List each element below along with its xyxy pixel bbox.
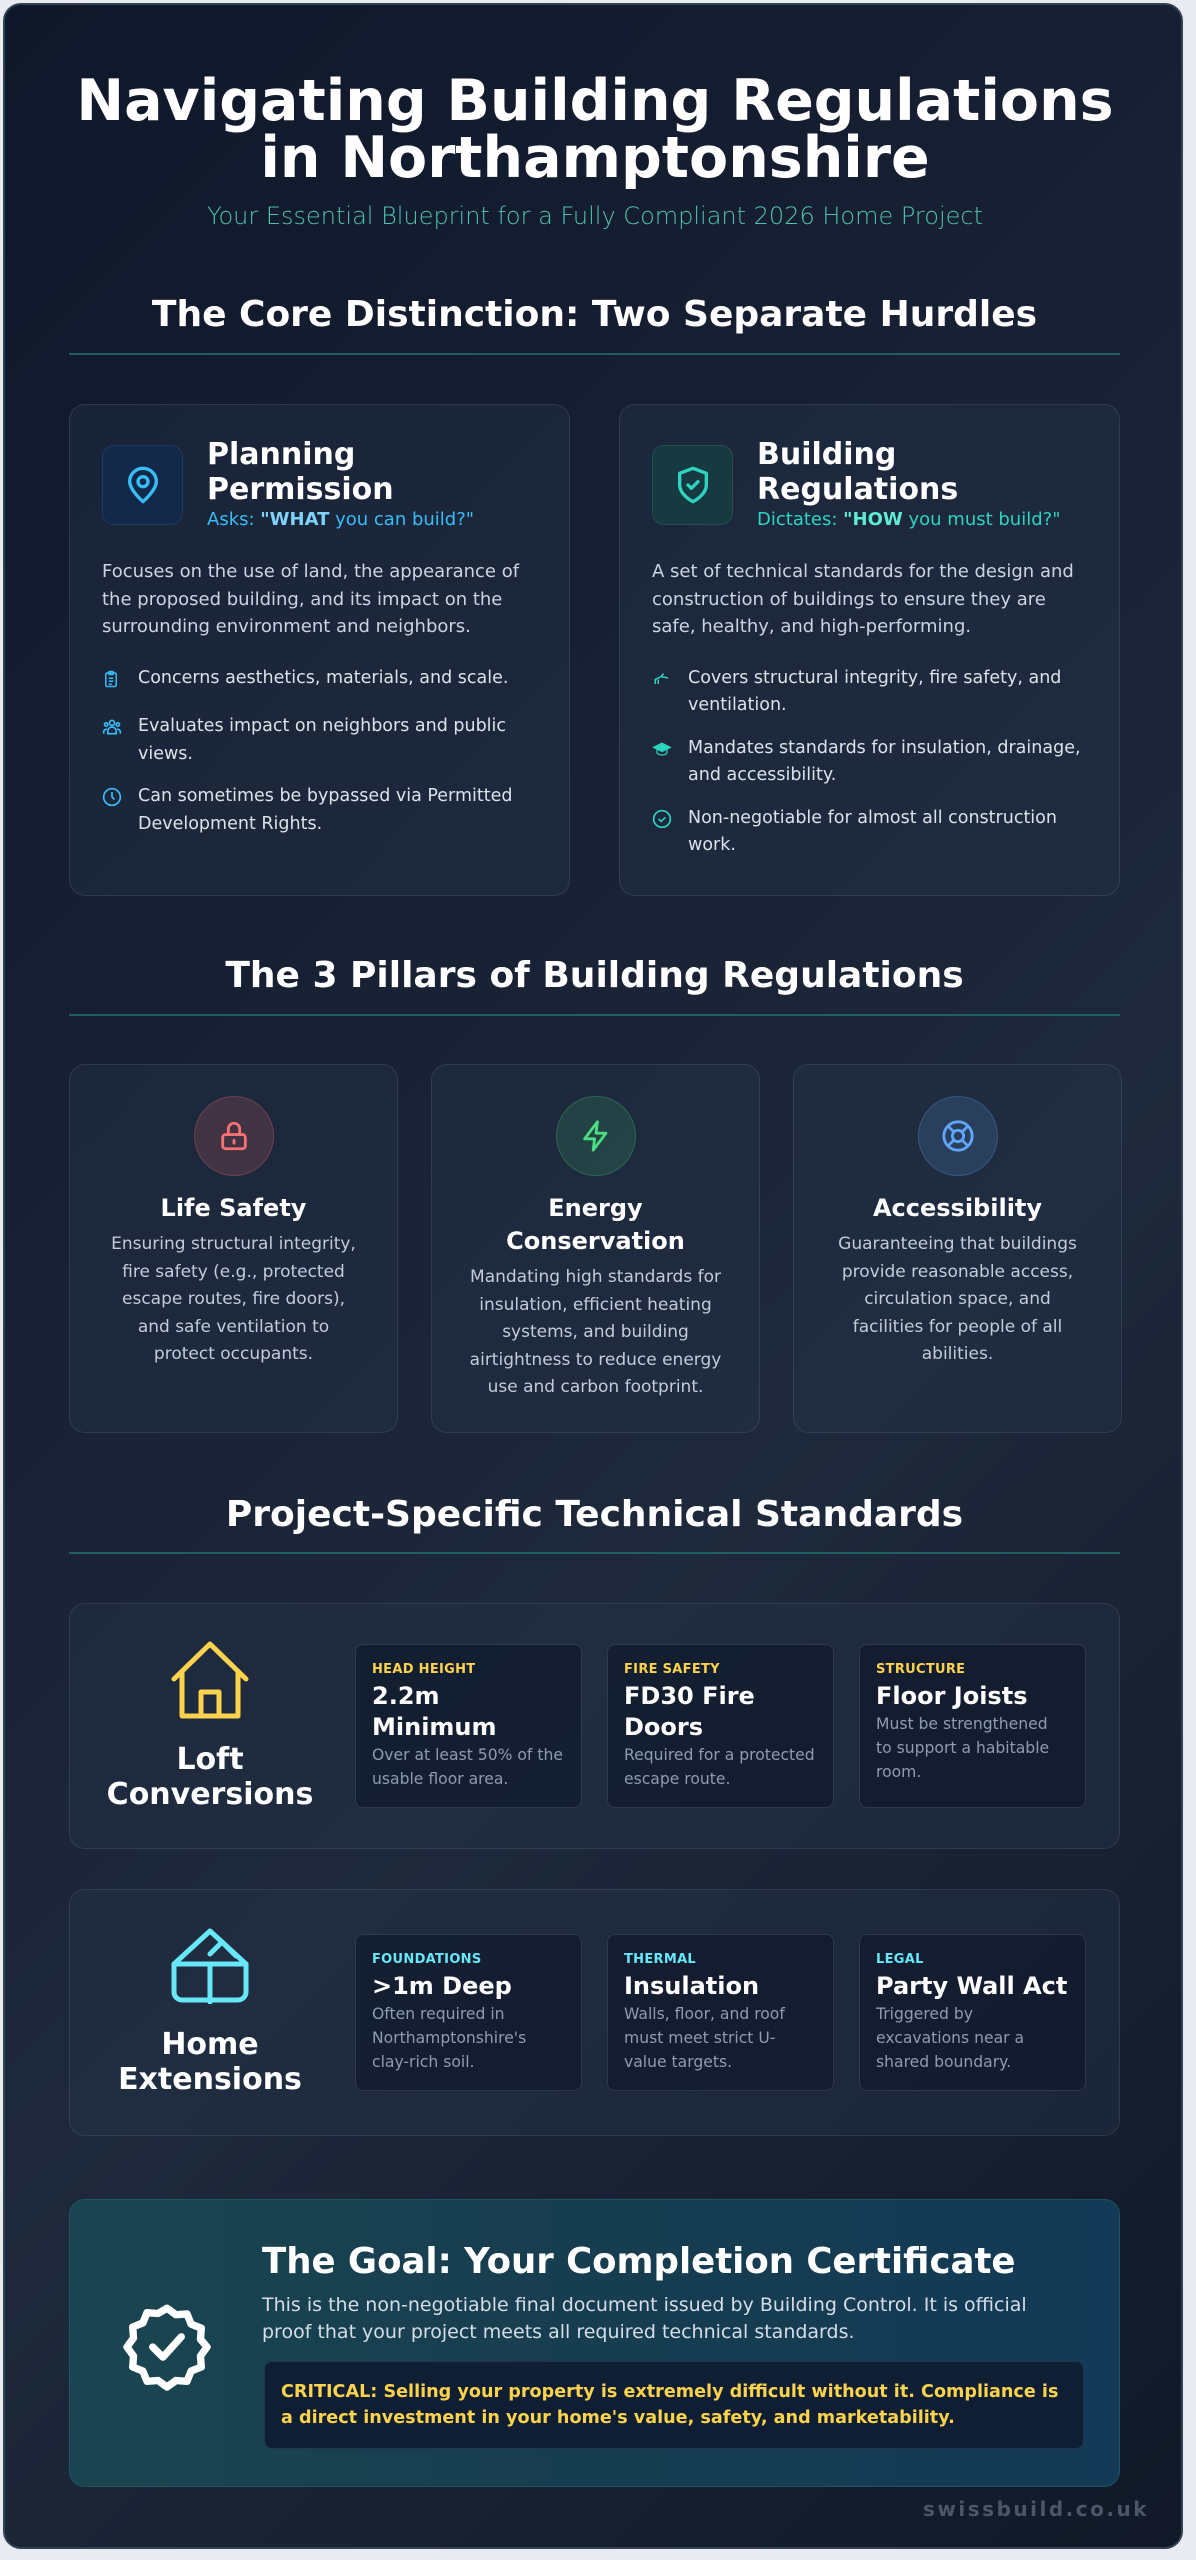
title	[76, 68, 1114, 191]
icon: shield check	[652, 445, 733, 525]
extension label	[118, 1928, 302, 2097]
subtitle: Your Essential Blueprint for a Fully Compliant 2026 Home Project	[207, 202, 983, 230]
panel: life safety	[69, 1064, 398, 1433]
loft label: Conversions	[107, 1776, 313, 1812]
panel: life safety: Life Safety	[161, 1194, 306, 1222]
list: building regs points: Non-negotiable for almost all construction work.	[688, 808, 1057, 855]
footer: brand: swissbuild.co.uk	[923, 2497, 1149, 2521]
header: planning: Permission	[207, 472, 394, 507]
loft standards: Floor Joists	[876, 1682, 1027, 1710]
header: planning: Planning	[207, 437, 355, 472]
heading: core distinction: The Core Distinction: Two Separate Hurdles	[152, 294, 1037, 335]
title: Navigating Building Regulations	[76, 68, 1114, 134]
icon: badge check	[123, 2304, 211, 2391]
loft standards: HEAD HEIGHT	[372, 1662, 475, 1677]
extension standards: Triggered by excavations near a shared boundary.	[876, 2005, 1024, 2071]
loft standards: FIRE SAFETY	[624, 1662, 720, 1677]
loft standards: to support a habitable room.	[876, 1739, 1049, 1781]
text: building regs description: A set of technical standards for the design and construction of buildings to ensure they are safe, healthy, and high-performing.	[652, 561, 1074, 637]
extension standards	[355, 1934, 1086, 2091]
certificate title: The Goal: Your Completion Certificate	[262, 2241, 1016, 2282]
header: planning	[102, 437, 474, 530]
icon: lock	[194, 1096, 274, 1176]
header: building regs: Dictates: "HOW you must build?"	[757, 509, 1060, 530]
certificate text	[262, 2294, 1027, 2343]
certificate text: proof that your project meets all required technical standards.	[262, 2321, 855, 2343]
list: building regs points	[652, 668, 1081, 855]
list: planning points: Evaluates impact on neighbors and public views.	[138, 716, 506, 764]
loft standards: Must be strengthened	[876, 1715, 1048, 1733]
loft standards: Over at least 50% of the usable floor area.	[372, 1746, 563, 1788]
panel: energy conservation: Energy	[548, 1194, 643, 1222]
callout: critical: CRITICAL: Selling your property is extremely difficult without it. Compliance is a direct investment in your home's value, safety, and marketability.	[281, 2382, 1058, 2428]
panel: energy conservation: Conservation	[506, 1227, 685, 1255]
callout: critical	[264, 2361, 1084, 2449]
icon: house	[172, 1642, 248, 1718]
extension label: Home	[161, 2027, 259, 2062]
extension standards: Insulation	[624, 1972, 759, 2000]
list: planning points	[102, 668, 512, 834]
icon: map pin	[102, 445, 183, 525]
loft label: Loft	[176, 1742, 244, 1776]
certificate text: This is the non-negotiable final document issued by Building Control. It is official	[262, 2294, 1027, 2316]
extension standards: Walls, floor, and roof must meet strict U-value targets.	[624, 2005, 785, 2071]
extension standards: Often required in Northamptonshire's clay-rich soil.	[372, 2005, 526, 2071]
list: building regs points: Covers structural integrity, fire safety, and ventilation.	[688, 668, 1061, 715]
panel: accessibility	[793, 1064, 1122, 1433]
heading: technical standards: Project-Specific Technical Standards	[226, 1494, 963, 1535]
loft standards: 2.2m Minimum	[372, 1682, 497, 1741]
icon: extension	[172, 1928, 248, 2004]
text: planning description: Focuses on the use of land, the appearance of the proposed building, and its impact on the surrounding environment and neighbors.	[102, 561, 519, 637]
loft standards: Required for a protected escape route.	[624, 1746, 815, 1788]
panel: home extensions	[69, 1889, 1120, 2136]
panel: loft conversions	[69, 1603, 1120, 1849]
extension standards: Party Wall Act	[876, 1972, 1067, 2000]
panel: energy conservation: Mandating high standards for insulation, efficient heating systems, and building airtightness to reduce energy use and carbon footprint.	[470, 1267, 721, 1397]
extension standards: FOUNDATIONS	[372, 1952, 482, 1967]
extension standards: LEGAL	[876, 1952, 924, 1967]
panel: accessibility: Guaranteeing that buildings provide reasonable access, circulation space, and facilities for people of all abilities.	[838, 1234, 1077, 1364]
icon: lightning	[556, 1096, 636, 1176]
heading: 3 pillars: The 3 Pillars of Building Regulations	[225, 955, 964, 996]
panel: planning permission	[69, 404, 570, 896]
list: building regs points: Mandates standards for insulation, drainage, and accessibility.	[688, 738, 1081, 785]
header: building regs	[652, 437, 1060, 530]
extension label: Extensions	[118, 2062, 302, 2097]
list: planning points: Can sometimes be bypassed via Permitted Development Rights.	[138, 786, 512, 834]
panel: accessibility: Accessibility	[873, 1194, 1042, 1222]
loft standards	[355, 1644, 1086, 1808]
loft standards: FD30 Fire Doors	[624, 1682, 755, 1741]
extension standards: THERMAL	[624, 1952, 696, 1967]
list: planning points: Concerns aesthetics, materials, and scale.	[138, 668, 508, 688]
header: planning: Asks: "WHAT you can build?"	[207, 509, 474, 530]
panel: completion certificate	[69, 2199, 1120, 2487]
panel: energy conservation	[431, 1064, 760, 1433]
icon: lifebuoy	[918, 1096, 998, 1176]
loft label	[107, 1642, 313, 1812]
header: building regs: Building	[757, 437, 896, 472]
panel: building regulations	[619, 404, 1120, 896]
extension standards: >1m Deep	[372, 1972, 512, 2000]
loft standards: STRUCTURE	[876, 1662, 965, 1677]
header: building regs: Regulations	[757, 472, 958, 507]
panel: life safety: Ensuring structural integrity, fire safety (e.g., protected escape routes, fire doors), and safe ventilation to protect occupants.	[111, 1234, 356, 1364]
title: in Northamptonshire	[260, 125, 930, 191]
